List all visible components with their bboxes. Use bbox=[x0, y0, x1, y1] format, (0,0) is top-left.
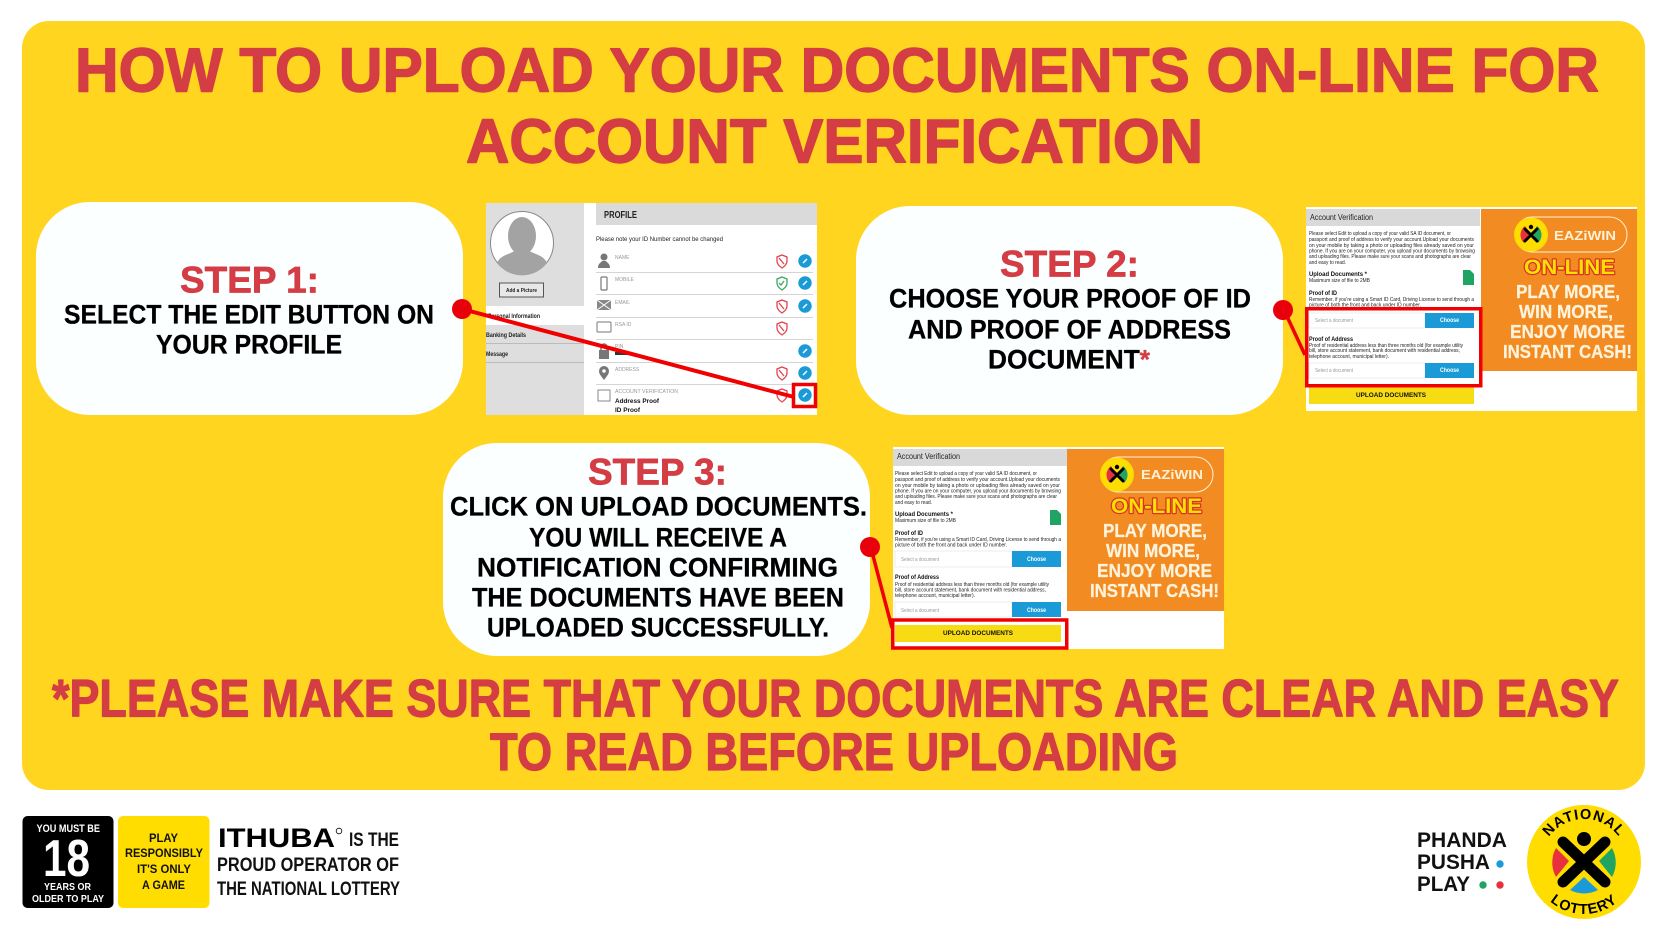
eaziwin badge bbox=[1100, 457, 1213, 492]
operator statement: ITHUBA bbox=[218, 823, 335, 853]
badge: must be 18: YOU MUST BE bbox=[36, 823, 100, 835]
banner slogan: PLAY MORE, bbox=[1516, 282, 1620, 302]
document selector 2: Choose bbox=[1027, 608, 1047, 614]
instructions text: on your mobile by taking a photo or uploading files already saved on your bbox=[1309, 243, 1474, 249]
instructions text: and easy to read. bbox=[1309, 260, 1346, 266]
proof of address: Proof of Address bbox=[895, 574, 939, 581]
instructions text: and easy to read. bbox=[895, 500, 932, 506]
proof of id: picture of both the front and back under ID number. bbox=[1309, 302, 1421, 308]
on-line: ON-LINE bbox=[1111, 495, 1202, 518]
step 3 instruction: NOTIFICATION CONFIRMING bbox=[477, 552, 838, 582]
profile note: Please note your ID Number cannot be changed bbox=[596, 237, 723, 243]
icon: green document bbox=[1050, 510, 1061, 525]
instructions text: Please select Edit to upload a copy of your valid SA ID document, or bbox=[1309, 231, 1451, 237]
document selector 2 bbox=[1309, 363, 1474, 378]
badge: must be 18: 18 bbox=[43, 830, 90, 888]
badge: play responsibly: A GAME bbox=[142, 880, 185, 892]
panel: step 1 card bbox=[36, 202, 463, 415]
proof of id: Proof of ID bbox=[1309, 290, 1337, 297]
national lottery logo bbox=[1527, 805, 1641, 919]
banner slogan: INSTANT CASH! bbox=[1090, 581, 1219, 601]
instructions text: and uploading files. Please make sure your scans and photographs are clear bbox=[1309, 254, 1471, 260]
add a picture button bbox=[500, 283, 544, 297]
document selector 2: Select a document bbox=[1315, 368, 1354, 374]
step 3 heading: STEP 3: bbox=[588, 452, 727, 492]
screenshot: account verification, step 3 bbox=[893, 447, 1224, 649]
instructions text: and uploading files. Please make sure your scans and photographs are clear bbox=[895, 494, 1057, 500]
document selector 1: Choose bbox=[1440, 318, 1460, 324]
title: ACCOUNT VERIFICATION bbox=[466, 108, 1203, 176]
document selector 1: Choose bbox=[1027, 557, 1047, 563]
arrow: step 2 to document selectors bbox=[1273, 300, 1481, 386]
upload documents label: Upload Documents * bbox=[1309, 271, 1367, 278]
national lottery logo: LOTTERY bbox=[1550, 894, 1614, 914]
proof of address bbox=[895, 574, 1049, 599]
screenshot: account verification, step 2 bbox=[1306, 207, 1637, 411]
proof of id bbox=[895, 530, 1061, 548]
instructions text: Please select Edit to upload a copy of your valid SA ID document, or bbox=[895, 471, 1037, 477]
proof of address: bill, store account statement, bank document with residential address, bbox=[895, 588, 1046, 594]
badge: must be 18 bbox=[22, 816, 114, 908]
note: clear documents reminder: TO READ BEFORE UPLOADING bbox=[490, 723, 1178, 782]
step 1 instruction: YOUR PROFILE bbox=[156, 330, 342, 360]
slogan: phanda pusha play: PHANDA bbox=[1417, 829, 1507, 852]
proof of address: telephone account, municipal letter). bbox=[895, 593, 975, 599]
row labels: RSA ID bbox=[615, 322, 632, 328]
banner slogan: WIN MORE, bbox=[1106, 541, 1200, 561]
banner slogan: ENJOY MORE bbox=[1510, 322, 1625, 342]
document selector 1 bbox=[895, 551, 1061, 567]
account verification row values: ID Proof bbox=[615, 407, 641, 414]
slogan: phanda pusha play bbox=[1417, 829, 1507, 896]
proof of id: Remember, if you're using a Smart ID Card, Driving License to send through a bbox=[1309, 297, 1474, 303]
upload documents button bbox=[895, 625, 1061, 642]
arrow: step 3 to upload button bbox=[860, 537, 1067, 648]
proof of address: Proof of Address bbox=[1309, 336, 1353, 343]
operator statement: PROUD OPERATOR OF bbox=[217, 855, 399, 876]
badge: play responsibly bbox=[118, 816, 210, 908]
banner slogan bbox=[1503, 282, 1632, 362]
step 3 instruction: CLICK ON UPLOAD DOCUMENTS. bbox=[450, 492, 867, 522]
verification shields bbox=[777, 255, 787, 402]
badge: play responsibly: IT'S ONLY bbox=[137, 864, 191, 876]
step 1 instruction: SELECT THE EDIT BUTTON ON bbox=[64, 300, 434, 330]
title: HOW TO UPLOAD YOUR DOCUMENTS ON-LINE FOR bbox=[75, 36, 1599, 106]
document selector 2: Select a document bbox=[901, 608, 940, 614]
eaziwin badge: EAZiWIN bbox=[1554, 228, 1616, 243]
panel: step 2 card bbox=[856, 206, 1283, 415]
upload documents button: UPLOAD DOCUMENTS bbox=[1356, 392, 1427, 399]
step 3 instruction: YOU WILL RECEIVE A bbox=[529, 522, 787, 552]
instructions text: phone. If you are on your computer, you upload your documents by browsing bbox=[895, 488, 1061, 494]
arrow: step 1 to edit button bbox=[452, 299, 816, 406]
row labels: EMAIL bbox=[615, 300, 630, 306]
proof of address: Proof of residential address less than three months old (for example utility bbox=[1309, 343, 1463, 349]
panel: step 3 card bbox=[443, 443, 870, 656]
step 3 instruction: THE DOCUMENTS HAVE BEEN bbox=[472, 582, 844, 612]
step 2 instruction: CHOOSE YOUR PROOF OF ID bbox=[889, 284, 1251, 314]
row labels bbox=[615, 255, 678, 395]
upload documents label bbox=[895, 511, 956, 524]
icon: green document bbox=[1463, 270, 1474, 285]
eaziwin badge: EAZiWIN bbox=[1141, 467, 1203, 482]
screenshot: account verification, step 2: Account Verification bbox=[1310, 213, 1373, 222]
badge: play responsibly: RESPONSIBLY bbox=[125, 848, 203, 860]
document selector 1 bbox=[1309, 313, 1474, 328]
proof of id: Remember, if you're using a Smart ID Card, Driving License to send through a bbox=[895, 537, 1061, 543]
row icons bbox=[597, 254, 611, 401]
avatar bbox=[490, 212, 554, 275]
title bbox=[75, 36, 1599, 176]
instructions text: passport and proof of address to verify your account.Upload your documents bbox=[895, 477, 1060, 483]
row labels: NAME bbox=[615, 255, 630, 261]
banner slogan: INSTANT CASH! bbox=[1503, 342, 1632, 362]
row labels: ADDRESS bbox=[615, 367, 640, 373]
upload documents label: Upload Documents * bbox=[895, 511, 953, 518]
instructions text: phone. If you are on your computer, you upload your documents by browsing bbox=[1309, 248, 1475, 254]
screenshot: profile page bbox=[486, 203, 817, 415]
edit buttons bbox=[798, 254, 812, 402]
step 1 instruction bbox=[64, 300, 434, 360]
note: clear documents reminder bbox=[52, 670, 1619, 782]
profile menu: Personal Information bbox=[488, 314, 540, 320]
document selector 1: Select a document bbox=[901, 557, 940, 563]
document selector 2: Choose bbox=[1440, 368, 1460, 374]
row labels: ACCOUNT VERIFICATION bbox=[615, 389, 678, 395]
instructions text: on your mobile by taking a photo or uploading files already saved on your bbox=[895, 483, 1060, 489]
on-line: ON-LINE bbox=[1524, 256, 1615, 279]
account verification row values: Address Proof bbox=[615, 398, 660, 405]
operator statement bbox=[217, 823, 400, 900]
national lottery logo: NATIONAL bbox=[1542, 808, 1622, 836]
badge: must be 18: YEARS OR bbox=[44, 881, 91, 893]
eaziwin banner bbox=[1067, 449, 1224, 611]
screenshot: account verification, step 3: Account Verification bbox=[897, 452, 960, 461]
proof of address: Proof of residential address less than three months old (for example utility bbox=[895, 582, 1049, 588]
banner slogan: ENJOY MORE bbox=[1097, 561, 1212, 581]
upload documents label: Maximum size of file to 2MB bbox=[1309, 278, 1370, 284]
add a picture button: Add a Picture bbox=[506, 288, 537, 294]
upload documents label bbox=[1309, 271, 1370, 284]
profile heading: PROFILE bbox=[604, 209, 637, 221]
upload documents label: Maximum size of file to 2MB bbox=[895, 518, 956, 524]
main yellow panel bbox=[22, 21, 1645, 790]
banner slogan: PLAY MORE, bbox=[1103, 521, 1207, 541]
step 2 instruction bbox=[889, 284, 1251, 374]
proof of address: telephone account, municipal letter). bbox=[1309, 354, 1389, 360]
account verification row values bbox=[615, 352, 660, 414]
proof of id bbox=[1309, 290, 1474, 308]
profile menu: Message bbox=[486, 352, 509, 358]
document selector 2 bbox=[895, 602, 1061, 617]
proof of address bbox=[1309, 336, 1463, 360]
badge: must be 18: OLDER TO PLAY bbox=[32, 893, 104, 905]
step 2 instruction: AND PROOF OF ADDRESS bbox=[908, 314, 1231, 344]
slogan: phanda pusha play: PLAY bbox=[1417, 873, 1470, 896]
upload documents button: UPLOAD DOCUMENTS bbox=[943, 630, 1014, 637]
document selector 1: Select a document bbox=[1315, 318, 1354, 324]
row labels: PIN bbox=[615, 344, 624, 350]
proof of address: bill, store account statement, bank document with residential address, bbox=[1309, 348, 1460, 354]
operator statement: THE NATIONAL LOTTERY bbox=[217, 879, 400, 900]
proof of id: picture of both the front and back under ID number. bbox=[895, 542, 1007, 548]
instructions text bbox=[1309, 231, 1475, 266]
operator statement: IS THE bbox=[349, 830, 399, 851]
eaziwin banner bbox=[1481, 209, 1637, 371]
banner slogan: WIN MORE, bbox=[1519, 302, 1613, 322]
instructions text: passport and proof of address to verify your account.Upload your documents bbox=[1309, 237, 1474, 243]
upload documents button bbox=[1309, 387, 1474, 404]
step 2 heading: STEP 2: bbox=[1000, 244, 1139, 284]
instructions text bbox=[895, 471, 1061, 506]
step 2 instruction: DOCUMENT* bbox=[988, 344, 1151, 374]
slogan: phanda pusha play: PUSHA bbox=[1417, 851, 1490, 874]
proof of id: Proof of ID bbox=[895, 530, 923, 537]
step 1 heading: STEP 1: bbox=[180, 260, 319, 300]
row separators bbox=[596, 272, 813, 385]
step 3 instruction bbox=[450, 492, 867, 642]
banner slogan bbox=[1090, 521, 1219, 601]
profile menu bbox=[486, 306, 584, 363]
eaziwin badge bbox=[1514, 217, 1627, 252]
badge: play responsibly: PLAY bbox=[149, 833, 178, 845]
profile menu: Banking Details bbox=[486, 333, 527, 339]
row labels: MOBILE bbox=[615, 277, 635, 283]
step 3 instruction: UPLOADED SUCCESSFULLY. bbox=[487, 612, 829, 642]
